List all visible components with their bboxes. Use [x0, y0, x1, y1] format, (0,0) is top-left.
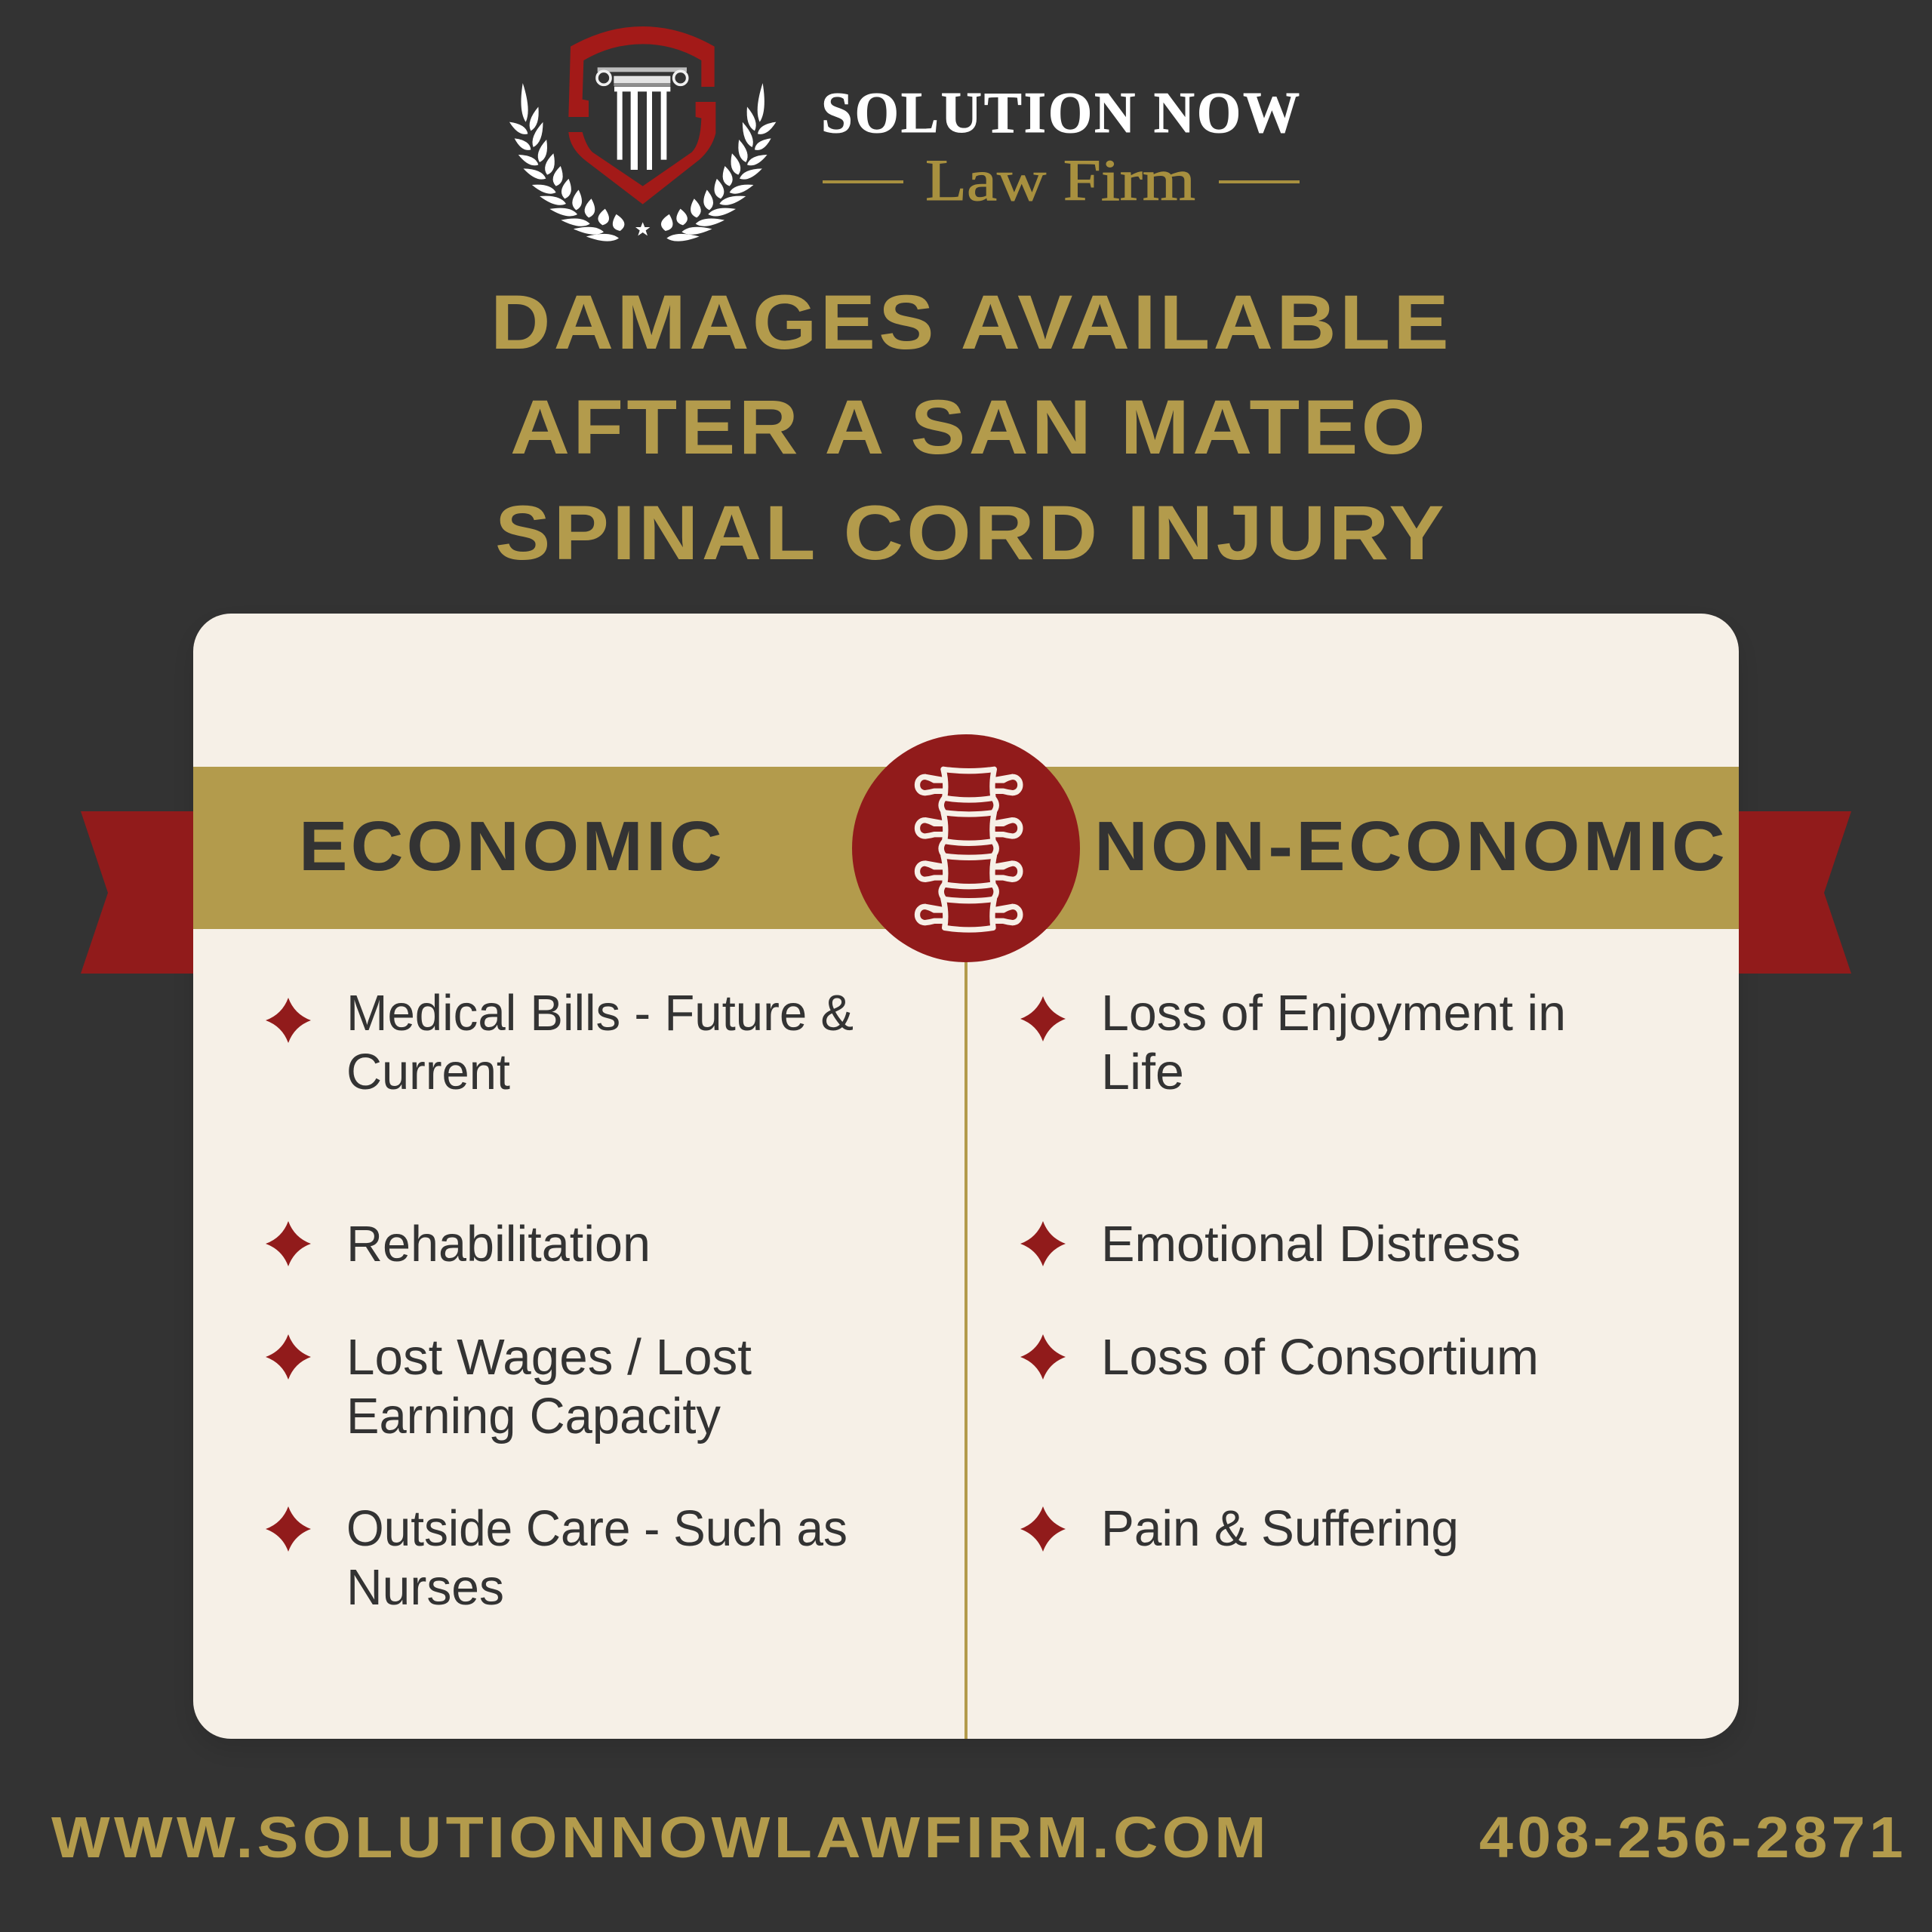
list: non-economic — [1020, 985, 1566, 1557]
item: lost wages: Lost Wages / Lost — [346, 1329, 752, 1386]
footer: phone: 408-256-2871 — [1479, 1805, 1907, 1870]
banner band — [193, 767, 1739, 929]
item: medical bills: Current — [346, 1044, 510, 1100]
item: pain and suffering: Pain & Suffering — [1101, 1500, 1459, 1557]
item: loss of consortium: Loss of Consortium — [1101, 1329, 1539, 1386]
item: outside care: Nurses — [346, 1559, 504, 1616]
item: loss of enjoyment — [1020, 985, 1566, 1100]
item: outside care: Outside Care - Such as — [346, 1500, 848, 1557]
heading: non-economic: NON-ECONOMIC — [1094, 807, 1728, 885]
item: emotional distress: Emotional Distress — [1101, 1216, 1521, 1272]
logo subtitle: Law Firm — [925, 147, 1195, 213]
item: outside care — [266, 1500, 848, 1616]
item: lost wages — [266, 1329, 752, 1444]
item: medical bills — [266, 985, 854, 1100]
item: loss of enjoyment: Life — [1101, 1044, 1184, 1100]
icon: spine in circle — [852, 734, 1080, 962]
ribbon tail right — [1739, 811, 1851, 974]
item: lost wages: Earning Capacity — [346, 1388, 721, 1444]
logo — [507, 26, 1302, 242]
panel: card — [81, 614, 1851, 1739]
icon: shield, column and laurel — [507, 26, 778, 242]
title: SPINAL CORD INJURY — [495, 490, 1447, 576]
ribbon tail left — [81, 811, 193, 974]
list: economic — [266, 985, 854, 1616]
heading: economic: ECONOMIC — [299, 807, 725, 885]
footer: website: WWW.SOLUTIONNOWLAWFIRM.COM — [51, 1805, 1270, 1870]
item: rehabilitation: Rehabilitation — [346, 1216, 651, 1272]
title: AFTER A SAN MATEO — [510, 384, 1429, 470]
title — [491, 279, 1452, 576]
center divider — [964, 958, 968, 1739]
item: medical bills: Medical Bills - Future & — [346, 985, 854, 1041]
logo name: SOLUTION NOW — [821, 80, 1302, 145]
item: loss of enjoyment: Loss of Enjoyment in — [1101, 985, 1566, 1041]
logo subtitle — [823, 147, 1300, 213]
title: DAMAGES AVAILABLE — [491, 279, 1452, 365]
